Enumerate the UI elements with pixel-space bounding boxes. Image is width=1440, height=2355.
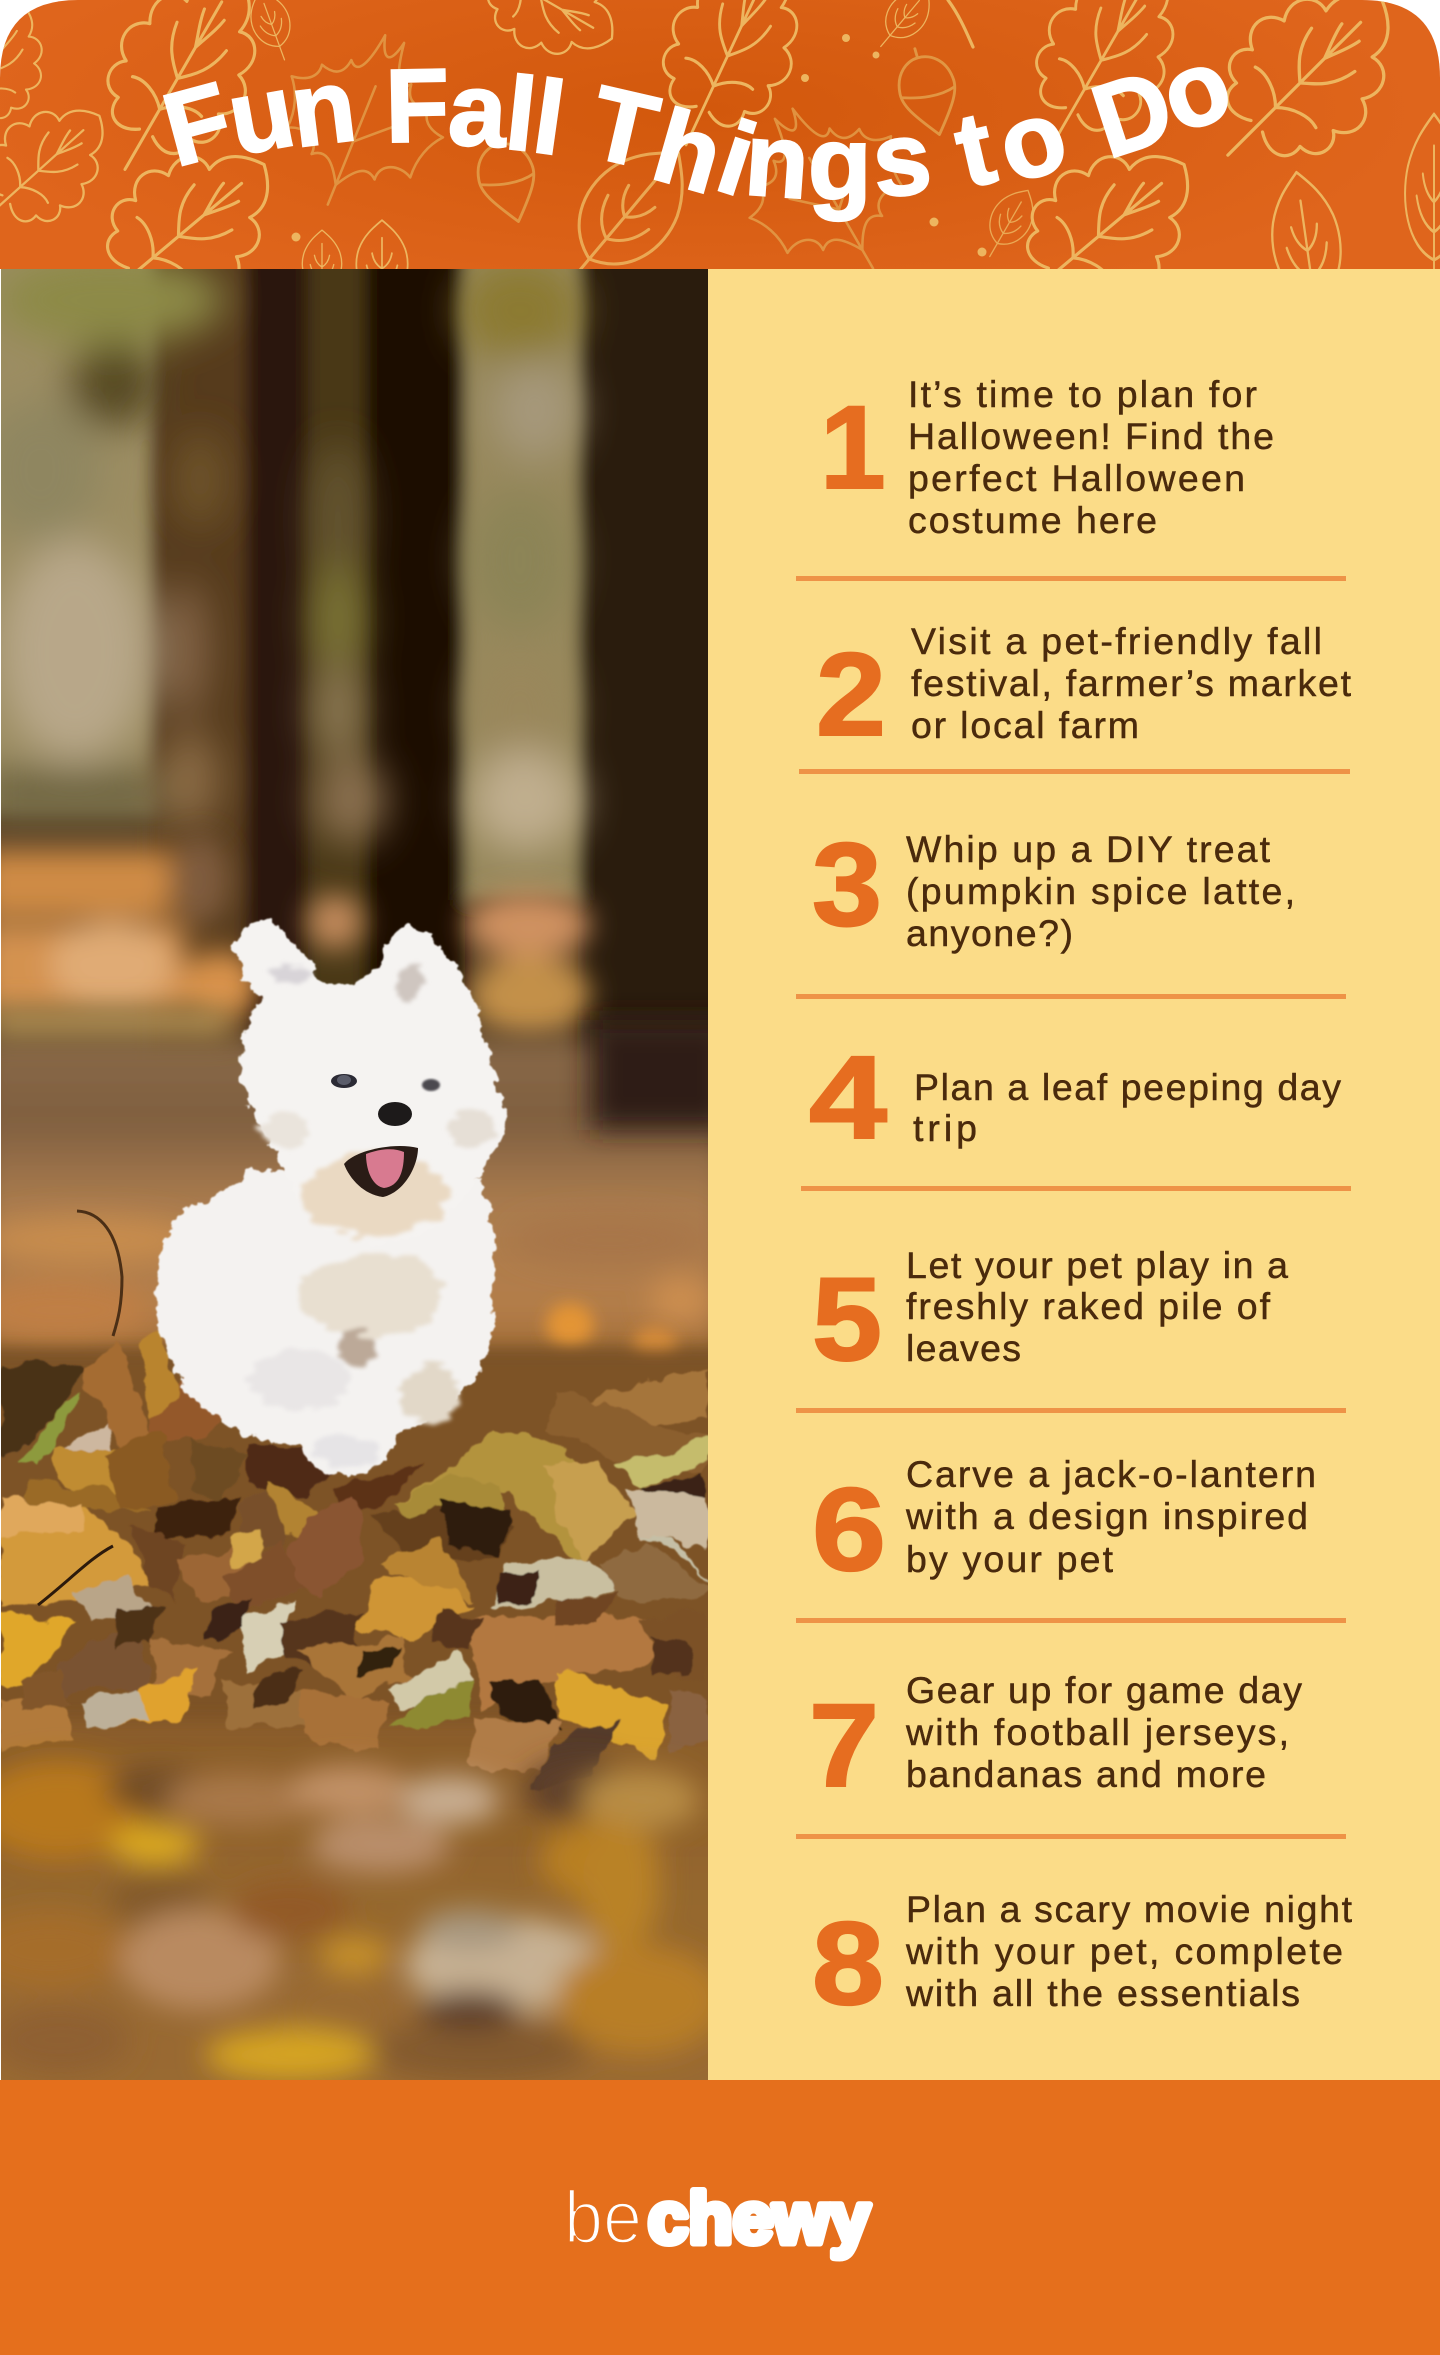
item 5 [812, 1244, 1288, 1386]
item 6: by your pet [906, 1538, 1114, 1580]
leaf pile [0, 1211, 728, 2100]
item 2: 2 [816, 629, 886, 761]
item 2: or local farm [911, 704, 1139, 746]
item 5: leaves [906, 1327, 1021, 1369]
dog face [331, 1074, 440, 1197]
decorative autumn leaf pattern [0, 0, 1440, 269]
item 6: with a design inspired [905, 1495, 1308, 1537]
item 4: trip [913, 1107, 977, 1149]
item 2 [816, 620, 1352, 761]
item 3: (pumpkin spice latte, [906, 870, 1295, 912]
item 1 [820, 373, 1274, 541]
item 7 [809, 1669, 1302, 1812]
fur shading [250, 965, 496, 1468]
item 4: 4 [809, 1032, 887, 1164]
item 1: It’s time to plan for [908, 373, 1257, 415]
dog body [156, 1170, 493, 1475]
dog head and ears [230, 917, 508, 1184]
item 1: Halloween! Find the [908, 415, 1274, 457]
item 7: 7 [809, 1680, 879, 1812]
footer band [0, 2080, 1440, 2355]
item 2: Visit a pet-friendly fall [911, 620, 1322, 662]
item 1: 1 [820, 382, 886, 514]
item 4: Plan a leaf peeping day [914, 1066, 1341, 1108]
item 6: Carve a jack-o-lantern [906, 1453, 1316, 1495]
item 7: with football jerseys, [905, 1711, 1289, 1753]
item 2: festival, farmer’s market [911, 662, 1352, 704]
item 5: 5 [812, 1254, 882, 1386]
item 7: bandanas and more [906, 1753, 1266, 1795]
item 8: with all the essentials [905, 1972, 1300, 2014]
item 5: Let your pet play in a [906, 1244, 1288, 1286]
header banner [0, 0, 1440, 269]
item 3: 3 [812, 819, 882, 951]
item 1: perfect Halloween [908, 457, 1245, 499]
logo: be chewy: be [564, 2176, 642, 2259]
item 3: anyone?) [906, 912, 1073, 954]
item 5: freshly raked pile of [906, 1285, 1271, 1327]
logo: be chewy [564, 2176, 870, 2259]
title: Fun Fall Things to Do [152, 25, 1246, 222]
dog [156, 921, 507, 1475]
item 8: Plan a scary movie night [906, 1888, 1353, 1930]
dark leaf stems [77, 1211, 122, 1336]
item 8 [812, 1888, 1353, 2030]
item 3: Whip up a DIY treat [906, 828, 1271, 870]
item 7: Gear up for game day [906, 1669, 1302, 1711]
item 8: 8 [812, 1898, 884, 2030]
blurred foreground leaves [0, 1760, 725, 2081]
item 3 [812, 819, 1295, 954]
item 6: 6 [812, 1464, 886, 1596]
logo: be chewy: chewy [648, 2179, 870, 2259]
item 4 [809, 1032, 1341, 1164]
item 6 [812, 1453, 1316, 1596]
panel: list background [708, 269, 1440, 2080]
blurred forest background with trunks [0, 250, 730, 1363]
item 1: costume here [908, 499, 1157, 541]
sharp mid-ground leaves [0, 1330, 708, 1790]
photo: white dog running through autumn leaves [0, 250, 730, 2100]
item 8: with your pet, complete [905, 1930, 1343, 1972]
